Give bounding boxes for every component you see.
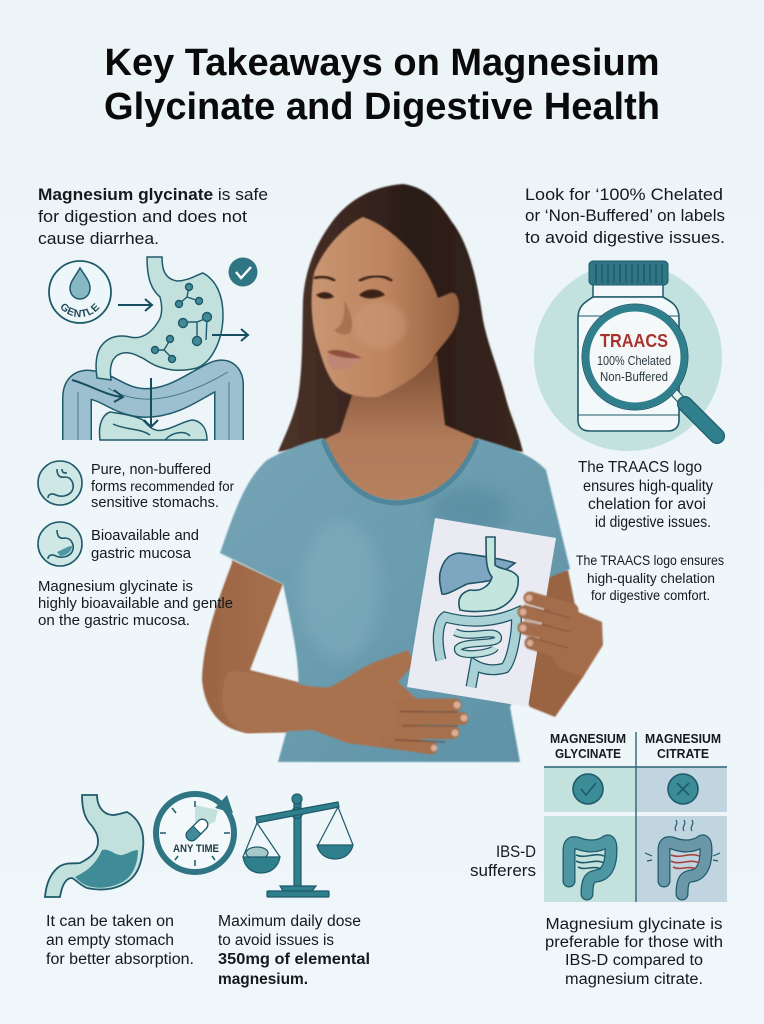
right forearm: [520, 570, 583, 717]
illustration: woman holding digestive diagram: [202, 184, 603, 762]
gentle badge: [48, 260, 112, 324]
hand holding paper: [520, 594, 603, 677]
right arrow: [212, 329, 248, 341]
magnifier lens: [586, 308, 684, 406]
colon arrow: [72, 380, 123, 402]
text: TRAACS logo bold note: chelation for avoi: [588, 496, 706, 513]
left arrow: [118, 299, 152, 311]
icon: stomach and colon diagram: [48, 256, 258, 441]
paper diagram: [438, 537, 518, 687]
text: gastric mucosa note: Magnesium glycinate is: [38, 578, 193, 595]
text: digestion safety: for digestion and does not: [38, 207, 247, 226]
text: gastric mucosa note: on the gastric mucosa.: [38, 612, 190, 629]
icon: balance scale: [243, 794, 353, 897]
column headings: MAGNESIUM: [550, 732, 626, 746]
row label: [470, 842, 536, 880]
comparison table: [470, 732, 727, 902]
colon: [77, 374, 229, 440]
column headings: MAGNESIUM: [645, 732, 721, 746]
text: TRAACS logo bold note: [578, 459, 713, 531]
cross icon: [668, 774, 698, 804]
text: maximum dose: magnesium.: [218, 971, 308, 988]
icon: stomach list 1: [38, 461, 82, 505]
paper: [407, 518, 556, 707]
irritated colon: [645, 820, 720, 894]
text: IBS-D conclusion: IBS-D compared to: [565, 952, 703, 969]
brows: [314, 276, 392, 281]
text: empty stomach: It can be taken on: [46, 913, 174, 930]
shirt torso: [220, 438, 570, 762]
upper left arm: [202, 560, 330, 733]
title: [104, 42, 660, 128]
text: TRAACS logo comfort note: for digestive comfort.: [591, 588, 710, 603]
gentle badge: GENTLE: [61, 303, 100, 318]
cheek light: [354, 301, 406, 349]
text: maximum dose: [218, 913, 370, 988]
text: TRAACS logo comfort note: high-quality chelation: [587, 571, 715, 586]
molecules: [152, 284, 212, 362]
icon: stomach with liquid: [45, 795, 143, 897]
text: digestion safety: [38, 185, 268, 248]
text: non-buffered forms: sensitive stomachs.: [91, 495, 219, 511]
column headings: GLYCINATE: [555, 747, 621, 761]
text: labels advice: Look for ‘100% Chelated: [525, 185, 723, 204]
icon: supplement bottle under magnifier: TRAACS: [600, 330, 668, 351]
hair back: [278, 184, 523, 452]
text: digestion safety: Magnesium glycinate is safe: [38, 185, 268, 204]
text: non-buffered forms: [91, 462, 234, 511]
text: labels advice: [525, 185, 725, 247]
forearm and hand on belly: [222, 650, 468, 751]
row label: IBS-D: [496, 842, 536, 861]
text: TRAACS logo bold note: The TRAACS logo: [578, 459, 702, 476]
down arrow: [144, 378, 158, 427]
text: IBS-D conclusion: magnesium citrate.: [565, 971, 703, 988]
text: bioavailable: gastric mucosa: [91, 545, 192, 562]
text: empty stomach: for better absorption.: [46, 951, 194, 968]
text: maximum dose: 350mg of elemental: [218, 951, 370, 968]
text: digestion safety: cause diarrhea.: [38, 229, 159, 248]
shirt highlight: [300, 520, 380, 660]
icon: any time clock: ANY TIME: [173, 843, 219, 855]
check badge: [228, 258, 258, 286]
text: IBS-D conclusion: Magnesium glycinate is: [546, 916, 723, 933]
text: IBS-D conclusion: preferable for those with: [545, 934, 723, 951]
text: TRAACS logo bold note: id digestive issues.: [595, 514, 711, 531]
text: gastric mucosa note: [38, 578, 233, 629]
column headings: CITRATE: [657, 747, 709, 761]
column headings: [550, 732, 721, 761]
row label: sufferers: [470, 861, 536, 880]
text: empty stomach: [46, 913, 194, 968]
small intestine: [99, 412, 207, 440]
text: gastric mucosa note: highly bioavailable and gentle: [38, 595, 233, 612]
text: TRAACS logo comfort note: The TRAACS logo ensures: [576, 553, 724, 568]
text: bioavailable: Bioavailable and: [91, 527, 199, 544]
icon: supplement bottle under magnifier: [534, 261, 722, 451]
text: IBS-D conclusion: [545, 916, 723, 988]
text: bioavailable: [91, 527, 199, 562]
icon: supplement bottle under magnifier: Non-Buffered: [600, 369, 668, 384]
title: Glycinate and Digestive Health: [104, 86, 660, 128]
face: [312, 217, 459, 397]
eyes: [316, 289, 385, 299]
text: maximum dose: Maximum daily dose: [218, 913, 361, 930]
text: empty stomach: an empty stomach: [46, 932, 174, 949]
check icon: [573, 774, 603, 804]
healthy colon: [569, 841, 611, 894]
icon: stomach list 2: [38, 522, 82, 566]
text: labels advice: or ‘Non-Buffered’ on labels: [525, 206, 725, 225]
stomach: [96, 257, 223, 380]
text: maximum dose: to avoid issues is: [218, 932, 334, 949]
title: Key Takeaways on Magnesium: [104, 42, 660, 84]
text: TRAACS logo bold note: ensures high-quality: [583, 478, 713, 495]
neck and chest: [318, 355, 485, 520]
icon: supplement bottle under magnifier: 100% Chelated: [597, 353, 671, 368]
text: labels advice: to avoid digestive issues.: [525, 228, 725, 247]
text: non-buffered forms: Pure, non-buffered: [91, 462, 211, 478]
lips: [327, 350, 362, 370]
text: TRAACS logo comfort note: [576, 553, 724, 603]
text: non-buffered forms: forms recommended for: [91, 479, 234, 495]
magnifier handle: [672, 390, 717, 436]
nose shade: [334, 300, 352, 334]
icon: any time clock: [156, 794, 234, 872]
